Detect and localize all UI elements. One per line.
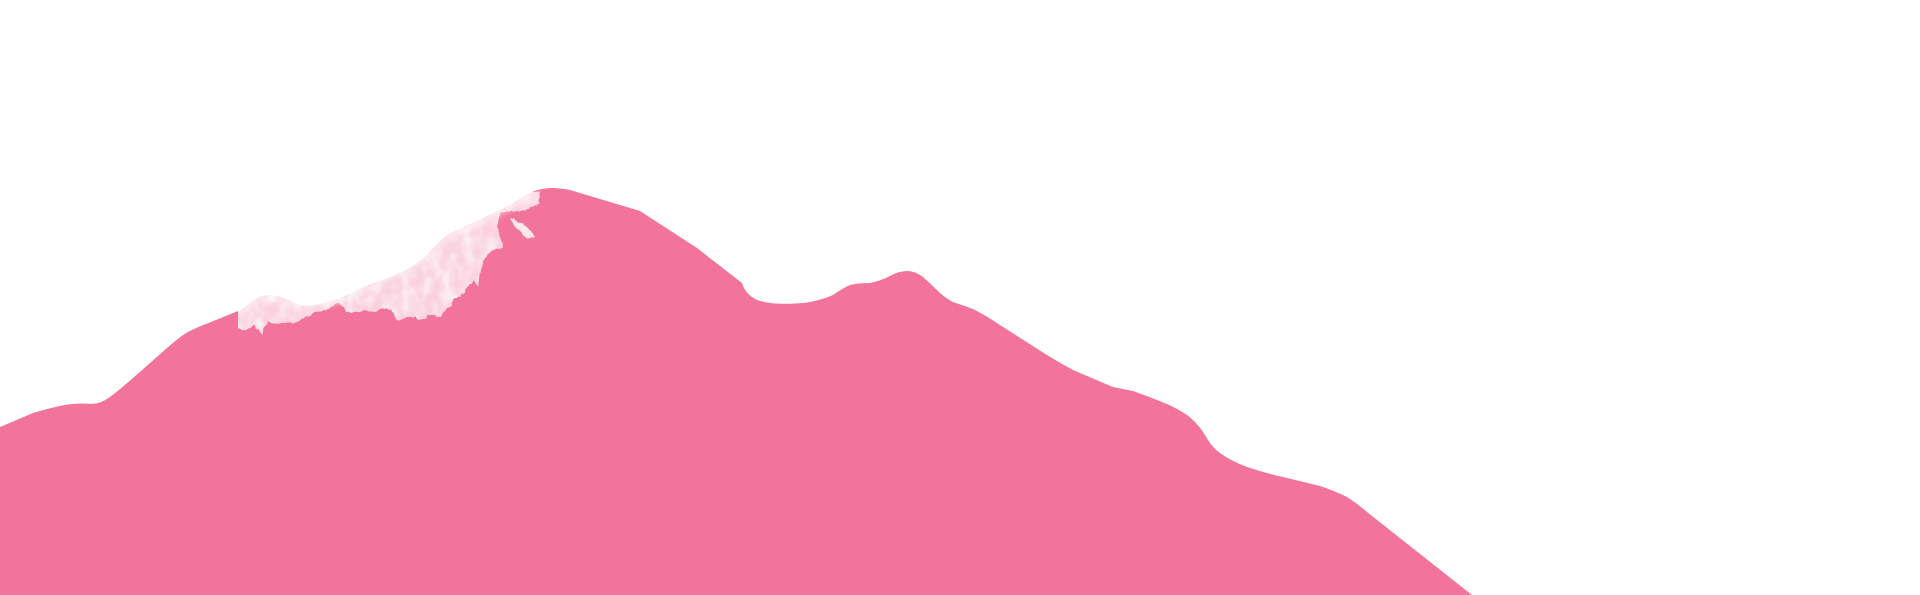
illustration: pink mountain silhouette with snow bbox=[0, 188, 1472, 595]
snow patch: small blob bbox=[510, 218, 536, 240]
mountain silhouette bbox=[0, 188, 1472, 595]
snow highlight along ridge bbox=[238, 194, 532, 312]
snow patch: ridge bbox=[233, 184, 540, 335]
snow cap bbox=[233, 184, 540, 335]
